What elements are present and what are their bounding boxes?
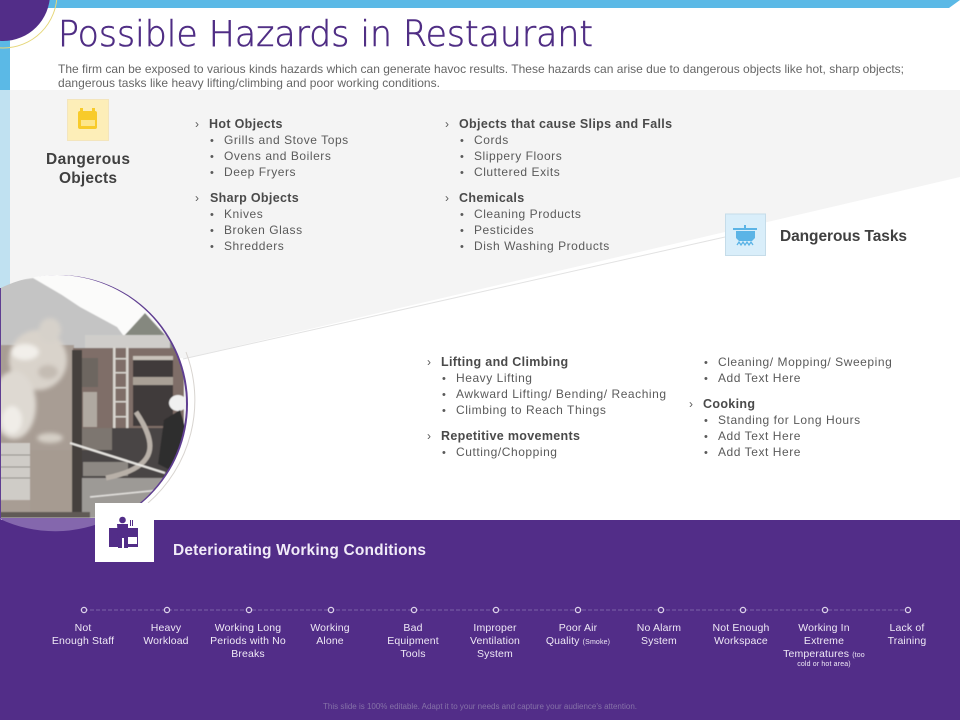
list: slips and falls: • xyxy=(460,151,464,163)
list: slips and falls: Cluttered Exits xyxy=(474,165,560,179)
list: cooking: • xyxy=(704,431,708,443)
list: lifting and climbing: • xyxy=(442,373,446,385)
list: sharp objects: • xyxy=(210,225,214,237)
heading: dangerous objects: Dangerous xyxy=(46,151,130,168)
list: chemicals: • xyxy=(460,209,464,221)
label: working alone: Working xyxy=(310,622,350,634)
list: hot objects: Grills and Stove Tops xyxy=(224,133,349,147)
list: cooking: Cooking xyxy=(703,397,755,411)
list: slips and falls xyxy=(445,117,672,179)
list: cleaning: • xyxy=(704,357,708,369)
heading: dangerous objects xyxy=(46,151,130,187)
label: working in extreme temperatures: Temperatures (too xyxy=(783,648,865,660)
list: slips and falls: Slippery Floors xyxy=(474,149,562,163)
list: lifting and climbing xyxy=(427,355,667,417)
list: hot objects: • xyxy=(210,151,214,163)
label: bad equipment tools: Bad xyxy=(403,622,423,634)
list: hot objects xyxy=(195,117,349,179)
list: sharp objects: • xyxy=(210,209,214,221)
list: lifting and climbing: • xyxy=(442,389,446,401)
corner purple circle xyxy=(0,0,57,48)
label: lack of training: Training xyxy=(888,635,926,647)
list: chemicals: Cleaning Products xyxy=(474,207,581,221)
list: hot objects: › xyxy=(195,117,199,131)
label: heavy workload: Heavy xyxy=(151,622,182,634)
label: lack of training: Lack of xyxy=(890,622,924,634)
label: working long periods: Working Long xyxy=(215,622,281,634)
intro text xyxy=(58,62,904,90)
label: no alarm system: No Alarm xyxy=(637,622,681,634)
label: bad equipment tools: Tools xyxy=(400,648,426,660)
list: repetitive movements: Cutting/Chopping xyxy=(456,445,558,459)
icon: dangerous tasks xyxy=(726,214,766,256)
label: improper ventilation system: Improper xyxy=(473,622,517,634)
list: hot objects: Ovens and Boilers xyxy=(224,149,331,163)
photo crescent over band xyxy=(0,518,95,532)
label: improper ventilation system: System xyxy=(477,648,513,660)
list: sharp objects: Shredders xyxy=(224,239,284,253)
label: heavy workload: Workload xyxy=(143,635,189,647)
list: chemicals: Dish Washing Products xyxy=(474,239,610,253)
list: repetitive movements xyxy=(427,429,580,459)
list: hot objects: • xyxy=(210,135,214,147)
list: chemicals: • xyxy=(460,225,464,237)
label: working long periods: Breaks xyxy=(231,648,265,660)
list: slips and falls: • xyxy=(460,135,464,147)
label: working in extreme temperatures: Extreme xyxy=(804,635,844,647)
label: not enough staff: Enough Staff xyxy=(52,635,114,647)
list: cooking: › xyxy=(689,397,693,411)
list: cooking: Add Text Here xyxy=(718,429,801,443)
list: sharp objects: Broken Glass xyxy=(224,223,303,237)
timeline xyxy=(81,607,911,613)
label: working in extreme temperatures: cold or hot area) xyxy=(797,661,851,668)
divider line to dangerous tasks xyxy=(183,237,725,359)
intro text: dangerous tasks like heavy lifting/climbing and poor working conditions. xyxy=(58,76,440,90)
label: not enough staff: Not xyxy=(75,622,91,634)
list: cooking: • xyxy=(704,447,708,459)
list: cleaning: Add Text Here xyxy=(718,371,801,385)
grey background panel xyxy=(10,90,960,358)
list: hot objects: Deep Fryers xyxy=(224,165,296,179)
list: slips and falls: • xyxy=(460,167,464,179)
list: cooking: Add Text Here xyxy=(718,445,801,459)
list: chemicals: Pesticides xyxy=(474,223,534,237)
heading: dangerous tasks: Dangerous Tasks xyxy=(780,228,907,245)
list: lifting and climbing: Awkward Lifting/ Bending/ Reaching xyxy=(456,387,667,401)
list: cooking: Standing for Long Hours xyxy=(718,413,861,427)
list: hot objects: • xyxy=(210,167,214,179)
intro text: The firm can be exposed to various kinds hazards which can generate havoc results. These hazards can arise due to dangerous objects like hot, sharp objects; xyxy=(58,62,904,76)
list: hot objects: Hot Objects xyxy=(209,117,283,131)
list: sharp objects xyxy=(195,191,303,253)
list: cooking: • xyxy=(704,415,708,427)
list: repetitive movements: › xyxy=(427,429,431,443)
list: cooking xyxy=(689,397,861,459)
list: cleaning xyxy=(704,355,892,385)
list: slips and falls: Cords xyxy=(474,133,509,147)
list: cleaning: • xyxy=(704,373,708,385)
label: poor air quality: Quality (Smoke) xyxy=(546,635,610,647)
icon: worker in kitchen xyxy=(95,503,154,562)
label: not enough workspace: Not Enough xyxy=(713,622,769,634)
heading: dangerous objects: Objects xyxy=(59,170,117,187)
label: no alarm system: System xyxy=(641,635,677,647)
heading: deteriorating working conditions: Deteriorating Working Conditions xyxy=(173,542,426,559)
list: chemicals xyxy=(445,191,610,253)
label: poor air quality: Poor Air xyxy=(559,622,598,634)
list: chemicals: Chemicals xyxy=(459,191,525,205)
footer note: This slide is 100% editable. Adapt it to your needs and capture your audience's attention. xyxy=(323,702,637,711)
list: sharp objects: Knives xyxy=(224,207,263,221)
list: lifting and climbing: Heavy Lifting xyxy=(456,371,533,385)
list: sharp objects: › xyxy=(195,191,199,205)
list: chemicals: › xyxy=(445,191,449,205)
list: lifting and climbing: › xyxy=(427,355,431,369)
label: working alone: Alone xyxy=(316,635,344,647)
label: working long periods: Periods with No xyxy=(210,635,286,647)
list: repetitive movements: • xyxy=(442,447,446,459)
top accent bar xyxy=(45,0,960,8)
label: not enough workspace: Workspace xyxy=(714,635,768,647)
list: slips and falls: › xyxy=(445,117,449,131)
purple footer band xyxy=(0,520,960,720)
list: slips and falls: Objects that cause Slips and Falls xyxy=(459,117,672,131)
list: cleaning: Cleaning/ Mopping/ Sweeping xyxy=(718,355,892,369)
list: chemicals: • xyxy=(460,241,464,253)
list: lifting and climbing: • xyxy=(442,405,446,417)
title: Possible Hazards in Restaurant xyxy=(58,14,593,55)
list: sharp objects: Sharp Objects xyxy=(210,191,299,205)
label: improper ventilation system: Ventilation xyxy=(470,635,520,647)
list: lifting and climbing: Climbing to Reach Things xyxy=(456,403,606,417)
list: repetitive movements: Repetitive movements xyxy=(441,429,580,443)
list: sharp objects: • xyxy=(210,241,214,253)
left accent strip xyxy=(0,0,10,300)
list: lifting and climbing: Lifting and Climbing xyxy=(441,355,568,369)
label: working in extreme temperatures: Working In xyxy=(798,622,850,634)
label: bad equipment tools: Equipment xyxy=(387,635,439,647)
photo circle: firefighters and fire engine xyxy=(0,270,195,533)
icon: dangerous objects xyxy=(68,100,108,140)
